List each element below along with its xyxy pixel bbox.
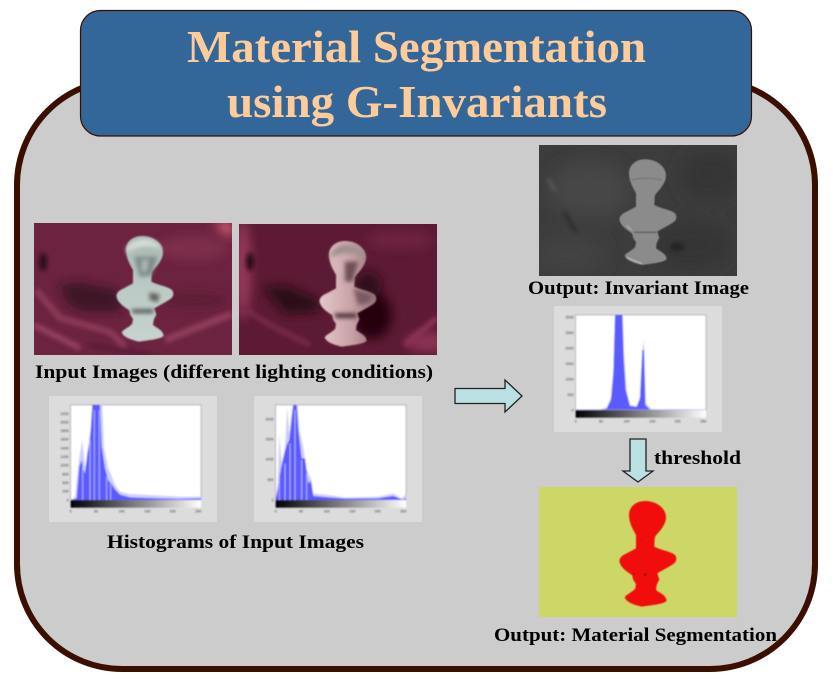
chart: histogram of input image 1: 100 bbox=[119, 510, 125, 514]
chart: histogram of input image 1 bbox=[49, 396, 217, 522]
chart: histogram of input image 2: 1000 bbox=[266, 458, 274, 462]
chart: histogram of input image 2: 150 bbox=[349, 510, 355, 514]
chart: histogram of invariant image: 2500 bbox=[566, 331, 574, 335]
chart: histogram of input image 2 bbox=[254, 396, 422, 522]
chart: histogram of input image 1: 600 bbox=[63, 481, 69, 485]
chart: histogram of input image 2: 2000 bbox=[266, 417, 274, 421]
chart: histogram of invariant image: 3000 bbox=[566, 316, 574, 320]
chart: histogram of invariant image bbox=[554, 306, 722, 432]
chart: histogram of input image 1: 250 bbox=[195, 510, 201, 514]
label: threshold: threshold bbox=[654, 448, 741, 469]
chart: histogram of input image 2: 0 bbox=[275, 510, 277, 514]
chart: histogram of input image 1: 0 bbox=[70, 510, 72, 514]
caption: input images: Input Images (different lighting conditions) bbox=[35, 362, 433, 383]
caption: invariant image: Output: Invariant Image bbox=[528, 278, 749, 299]
chart: histogram of input image 1: 1400 bbox=[61, 446, 69, 450]
chart: histogram of invariant image: 500 bbox=[568, 393, 574, 397]
chart: histogram of input image 2: 200 bbox=[375, 510, 381, 514]
arrow: right bbox=[455, 380, 522, 412]
chart: histogram of input image 1: 2200 bbox=[61, 412, 69, 416]
chart: histogram of invariant image: 1000 bbox=[566, 377, 574, 381]
chart: histogram of invariant image: 0 bbox=[572, 408, 574, 412]
photo: input image 1 bbox=[34, 223, 232, 355]
chart: histogram of invariant image: 100 bbox=[624, 420, 630, 424]
chart: histogram of input image 1: 1000 bbox=[61, 464, 69, 468]
chart: histogram of input image 2: 100 bbox=[324, 510, 330, 514]
chart: histogram of input image 2: 50 bbox=[299, 510, 303, 514]
chart: histogram of input image 1: 200 bbox=[63, 490, 69, 494]
chart: histogram of input image 2: 1500 bbox=[266, 438, 274, 442]
photo: invariant output image bbox=[535, 145, 740, 276]
image: material segmentation output bbox=[539, 487, 737, 617]
caption: histograms: Histograms of Input Images bbox=[107, 532, 364, 553]
chart: histogram of invariant image: 0 bbox=[575, 420, 577, 424]
chart: histogram of invariant image: 250 bbox=[700, 420, 706, 424]
chart: histogram of input image 2: 250 bbox=[400, 510, 406, 514]
title banner bbox=[80, 10, 752, 136]
chart: histogram of invariant image: 150 bbox=[649, 420, 655, 424]
title line 2: using G-Invariants bbox=[227, 76, 607, 127]
chart: histogram of input image 1: 1600 bbox=[61, 438, 69, 442]
caption: material segmentation: Output: Material Segmentation bbox=[494, 625, 777, 646]
chart: histogram of input image 2: 0 bbox=[272, 498, 274, 502]
chart: histogram of input image 1: 150 bbox=[144, 510, 150, 514]
chart: histogram of input image 1: 1200 bbox=[61, 455, 69, 459]
photo: input image 2 bbox=[239, 224, 437, 355]
chart: histogram of invariant image: 50 bbox=[599, 420, 603, 424]
chart: histogram of input image 1: 200 bbox=[170, 510, 176, 514]
chart: histogram of invariant image: 1500 bbox=[566, 362, 574, 366]
chart: histogram of input image 1: 0 bbox=[67, 498, 69, 502]
chart: histogram of input image 2: 500 bbox=[268, 478, 274, 482]
title line 1: Material Segmentation bbox=[187, 21, 646, 72]
chart: histogram of invariant image: 200 bbox=[675, 420, 681, 424]
arrow: down bbox=[623, 439, 653, 482]
chart: histogram of input image 1: 1800 bbox=[61, 429, 69, 433]
chart: histogram of input image 1: 50 bbox=[94, 510, 98, 514]
chart: histogram of invariant image: 2000 bbox=[566, 347, 574, 351]
chart: histogram of input image 1: 800 bbox=[63, 472, 69, 476]
chart: histogram of input image 1: 2000 bbox=[61, 420, 69, 424]
